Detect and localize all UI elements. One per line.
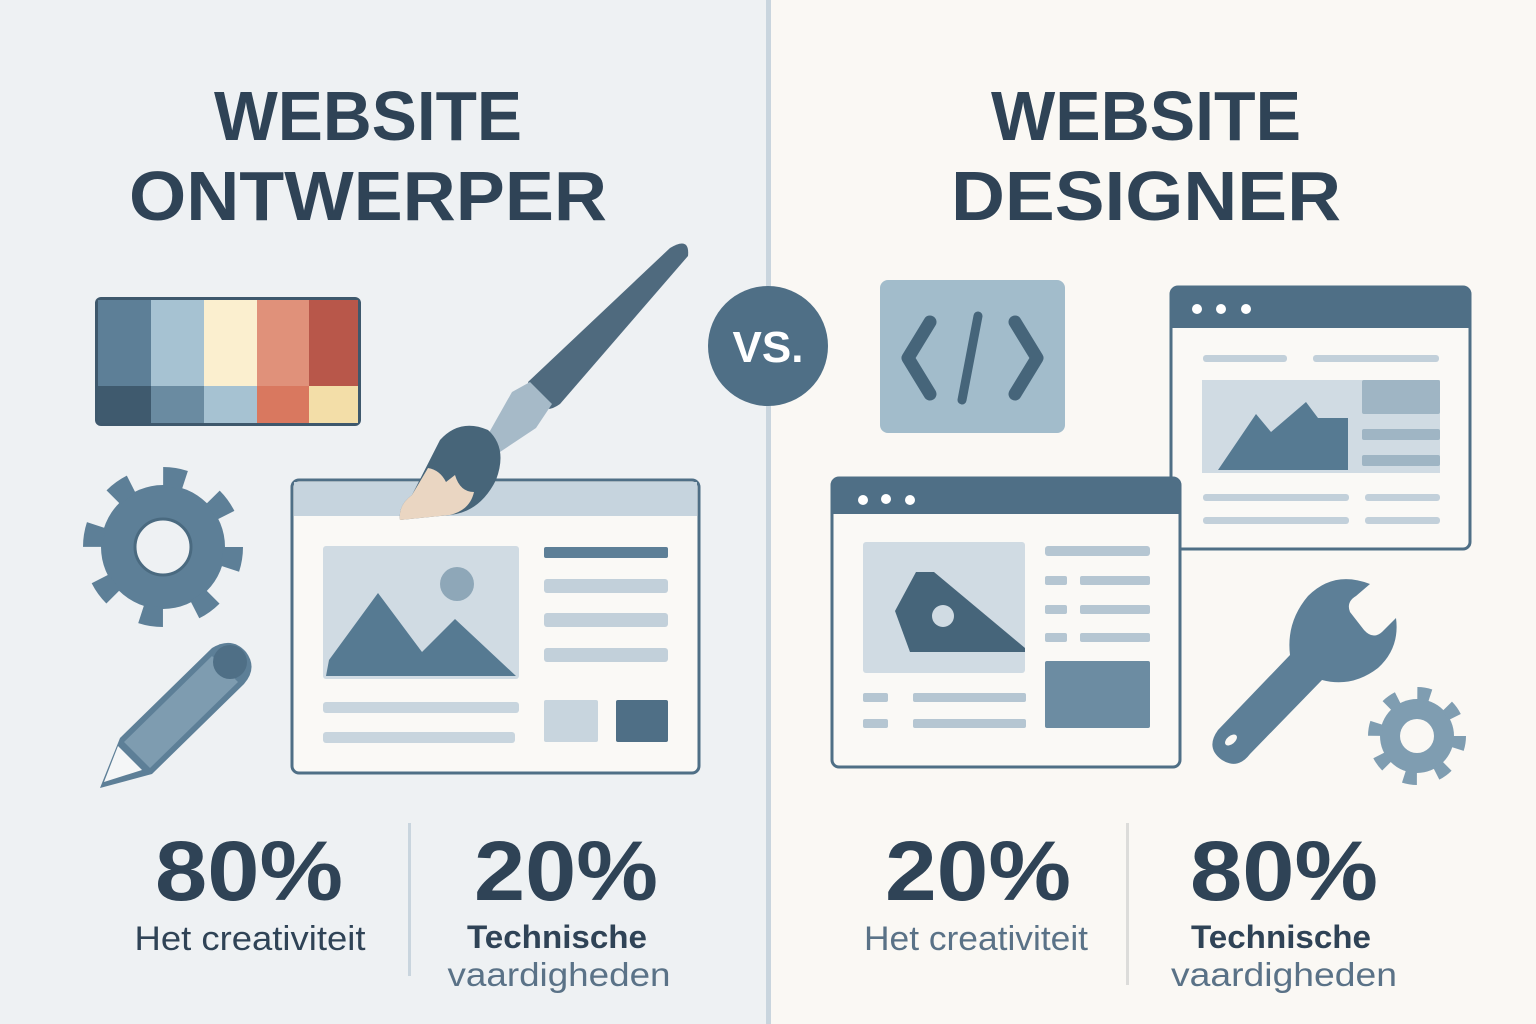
stat: 80% creativiteit (left)	[134, 824, 366, 958]
stat: 20% technische (left): 20%	[474, 824, 658, 918]
icon: colour palette	[95, 297, 361, 426]
image placeholder mountain	[326, 593, 516, 676]
stat: 20% creativiteit (right)	[864, 824, 1089, 958]
stat: 20% creativiteit (right): 20%	[885, 824, 1071, 918]
stat: 20% technische (left): vaardigheden	[448, 956, 670, 993]
browser window right front	[832, 478, 1180, 767]
title: website ontwerper: WEBSITE	[214, 77, 522, 155]
stat: 20% creativiteit (right): Het creativiteit	[864, 920, 1089, 958]
vs badge: VS.	[733, 323, 803, 372]
icon: paintbrush	[400, 244, 688, 520]
stat: 20% technische (left): Technische	[467, 919, 647, 955]
stat: 80% technische (right): 80%	[1190, 824, 1378, 918]
icon: wrench	[1212, 579, 1397, 764]
title: website designer: WEBSITE	[991, 77, 1301, 155]
title: website ontwerper: ONTWERPER	[129, 157, 607, 235]
title: website designer: DESIGNER	[951, 157, 1341, 235]
stat: 80% technische (right)	[1171, 824, 1397, 993]
browser window left	[292, 480, 699, 773]
icon: gear right	[1375, 694, 1459, 778]
icon: gear left	[93, 477, 233, 617]
icon: code tag box	[880, 280, 1065, 433]
browser window right back	[1171, 287, 1470, 549]
title: website designer	[951, 77, 1341, 235]
stat: 80% creativiteit (left): 80%	[155, 824, 343, 918]
title: website ontwerper	[129, 77, 607, 235]
stat: 80% technische (right): vaardigheden	[1171, 956, 1397, 993]
vs badge	[708, 286, 828, 406]
stat: 20% technische (left)	[448, 824, 670, 993]
icon: pencil	[100, 643, 252, 788]
stat: 80% creativiteit (left): Het creativiteit	[134, 920, 366, 958]
stat: 80% technische (right): Technische	[1191, 919, 1371, 955]
